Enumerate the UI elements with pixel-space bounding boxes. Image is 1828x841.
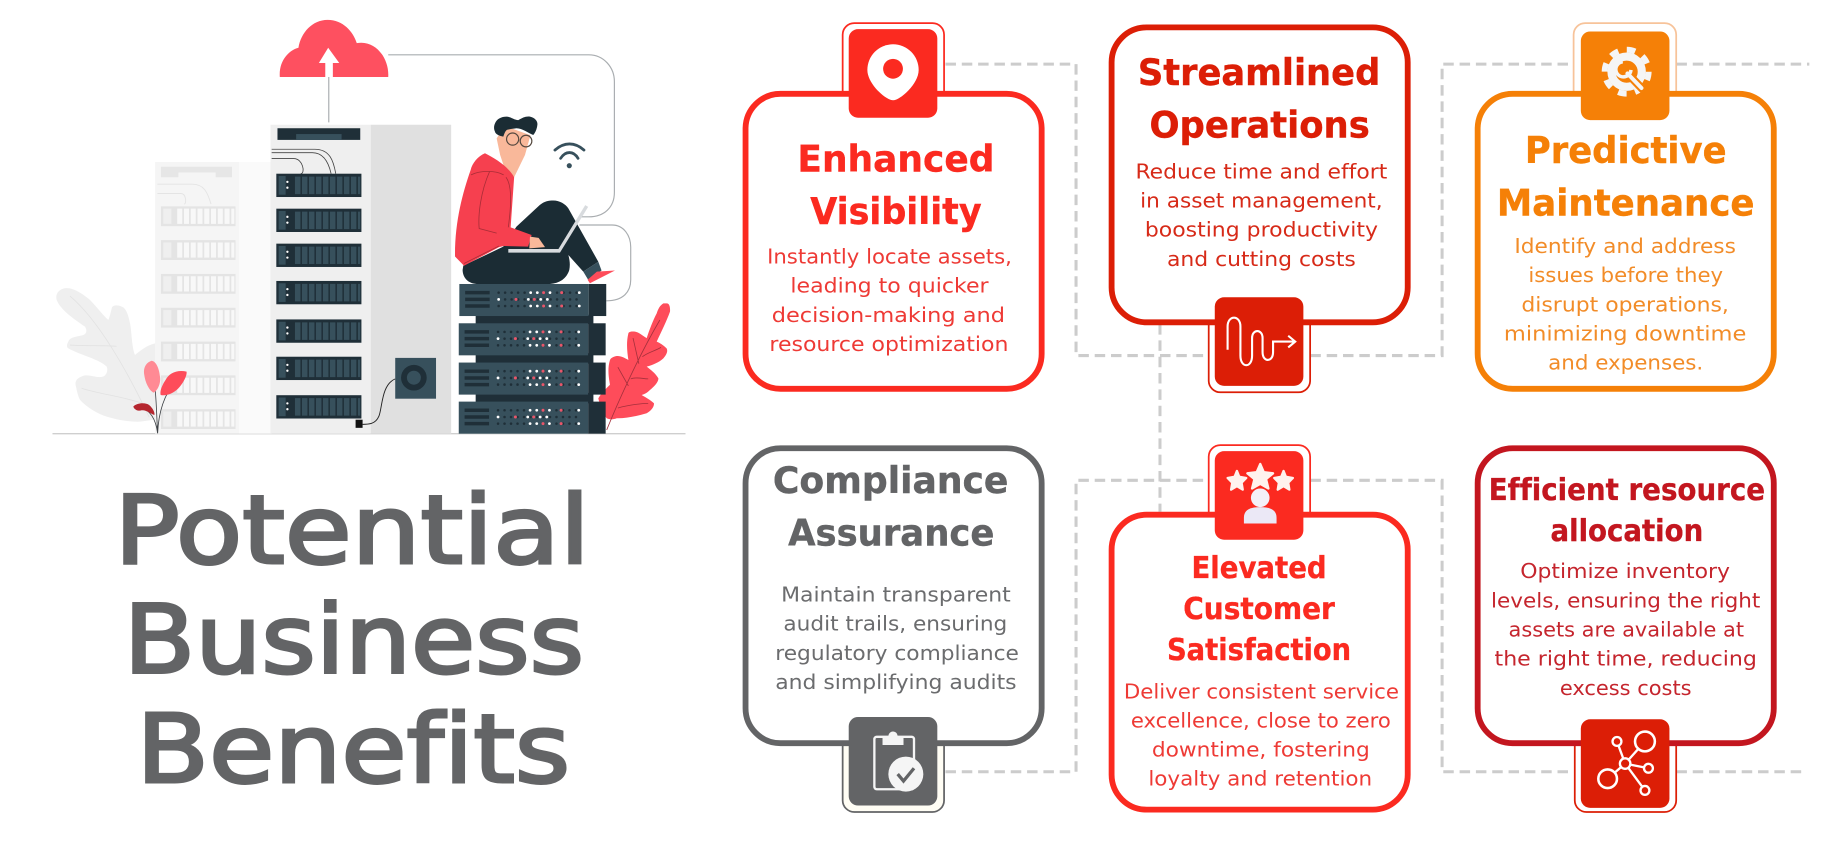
body text: minimizing downtime	[1504, 321, 1746, 345]
main server tower	[270, 125, 451, 434]
card: Elevated Customer Satisfaction	[1112, 445, 1408, 810]
body text	[1504, 234, 1746, 375]
icon: clipboard check	[849, 717, 937, 806]
card: Enhanced Visibility	[746, 23, 1042, 389]
heading: Enhanced	[797, 137, 994, 180]
dashed connectors	[945, 64, 1809, 772]
title: Business	[124, 586, 584, 696]
body text: Deliver consistent service	[1124, 679, 1399, 703]
heading	[1138, 51, 1380, 147]
card: Compliance Assurance	[746, 448, 1042, 812]
icon: small red plant	[133, 361, 187, 433]
heading	[773, 459, 1008, 555]
heading: Satisfaction	[1167, 633, 1351, 668]
heading: Efficient resource	[1489, 473, 1765, 508]
body text	[1124, 679, 1399, 791]
card: Efficient resource allocation	[1478, 448, 1774, 812]
ghost server rack	[155, 162, 272, 434]
heading: Visibility	[810, 190, 982, 233]
body text	[1491, 559, 1760, 700]
heading: allocation	[1551, 514, 1703, 549]
icon: stars and customer	[1215, 451, 1303, 540]
heading: Streamlined	[1138, 51, 1380, 94]
heading: Compliance	[773, 459, 1008, 502]
heading: Elevated	[1191, 551, 1327, 586]
body text: disrupt operations,	[1521, 292, 1729, 316]
body text: Reduce time and effort	[1135, 159, 1387, 183]
person sitting with laptop	[455, 116, 615, 284]
icon: cloud upload	[280, 20, 388, 77]
body text: loyalty and retention	[1148, 767, 1372, 791]
heading	[1497, 129, 1755, 225]
body text	[767, 244, 1012, 356]
heading	[1489, 473, 1765, 549]
icon: gear and wrench	[1581, 31, 1669, 120]
heading: Assurance	[788, 512, 994, 555]
body text: downtime, fostering	[1152, 738, 1370, 762]
icon: grey leaf	[56, 288, 155, 422]
body text: Identify and address	[1514, 234, 1736, 258]
heading	[1167, 551, 1351, 668]
body text: leading to quicker	[790, 274, 989, 298]
card: Streamlined Operations	[1112, 27, 1408, 392]
body text: audit trails, ensuring	[783, 612, 1007, 636]
card: Predictive Maintenance	[1478, 23, 1774, 389]
body text: and cutting costs	[1167, 247, 1356, 271]
title: Potential	[114, 476, 590, 586]
body text: excess costs	[1560, 676, 1692, 700]
body text: excellence, close to zero	[1131, 708, 1391, 732]
illustration: person on servers	[52, 20, 686, 434]
icon: network nodes	[1581, 719, 1669, 808]
server stack	[459, 284, 606, 434]
body text: regulatory compliance	[775, 641, 1019, 665]
body text: boosting productivity	[1145, 218, 1378, 242]
body text: issues before they	[1528, 263, 1723, 287]
body text: assets are available at	[1509, 618, 1744, 642]
body text: resource optimization	[769, 332, 1008, 356]
heading: Customer	[1183, 592, 1335, 627]
heading: Predictive	[1525, 129, 1727, 172]
heading: Operations	[1149, 104, 1370, 147]
icon: process squiggle arrow	[1215, 297, 1303, 386]
body text: the right time, reducing	[1495, 647, 1757, 671]
icon: fan box with cable	[356, 358, 436, 428]
ground line	[52, 433, 686, 435]
icon: wifi	[555, 144, 584, 168]
title	[114, 476, 590, 805]
body text	[775, 583, 1019, 694]
heading: Maintenance	[1497, 182, 1755, 225]
title: Benefits	[136, 695, 570, 805]
cables and cloud link	[329, 55, 631, 301]
body text: and simplifying audits	[775, 670, 1017, 694]
body text: Instantly locate assets,	[767, 244, 1012, 268]
body text: and expenses.	[1548, 351, 1703, 375]
body text	[1135, 159, 1387, 271]
body text: in asset management,	[1140, 189, 1383, 213]
body text: Optimize inventory	[1520, 559, 1730, 583]
body text: decision-making and	[772, 303, 1005, 327]
icon: location pin	[849, 29, 937, 118]
body text: Maintain transparent	[781, 583, 1011, 607]
body text: levels, ensuring the right	[1491, 588, 1760, 612]
icon: red leaf	[598, 303, 670, 430]
heading	[797, 137, 994, 233]
